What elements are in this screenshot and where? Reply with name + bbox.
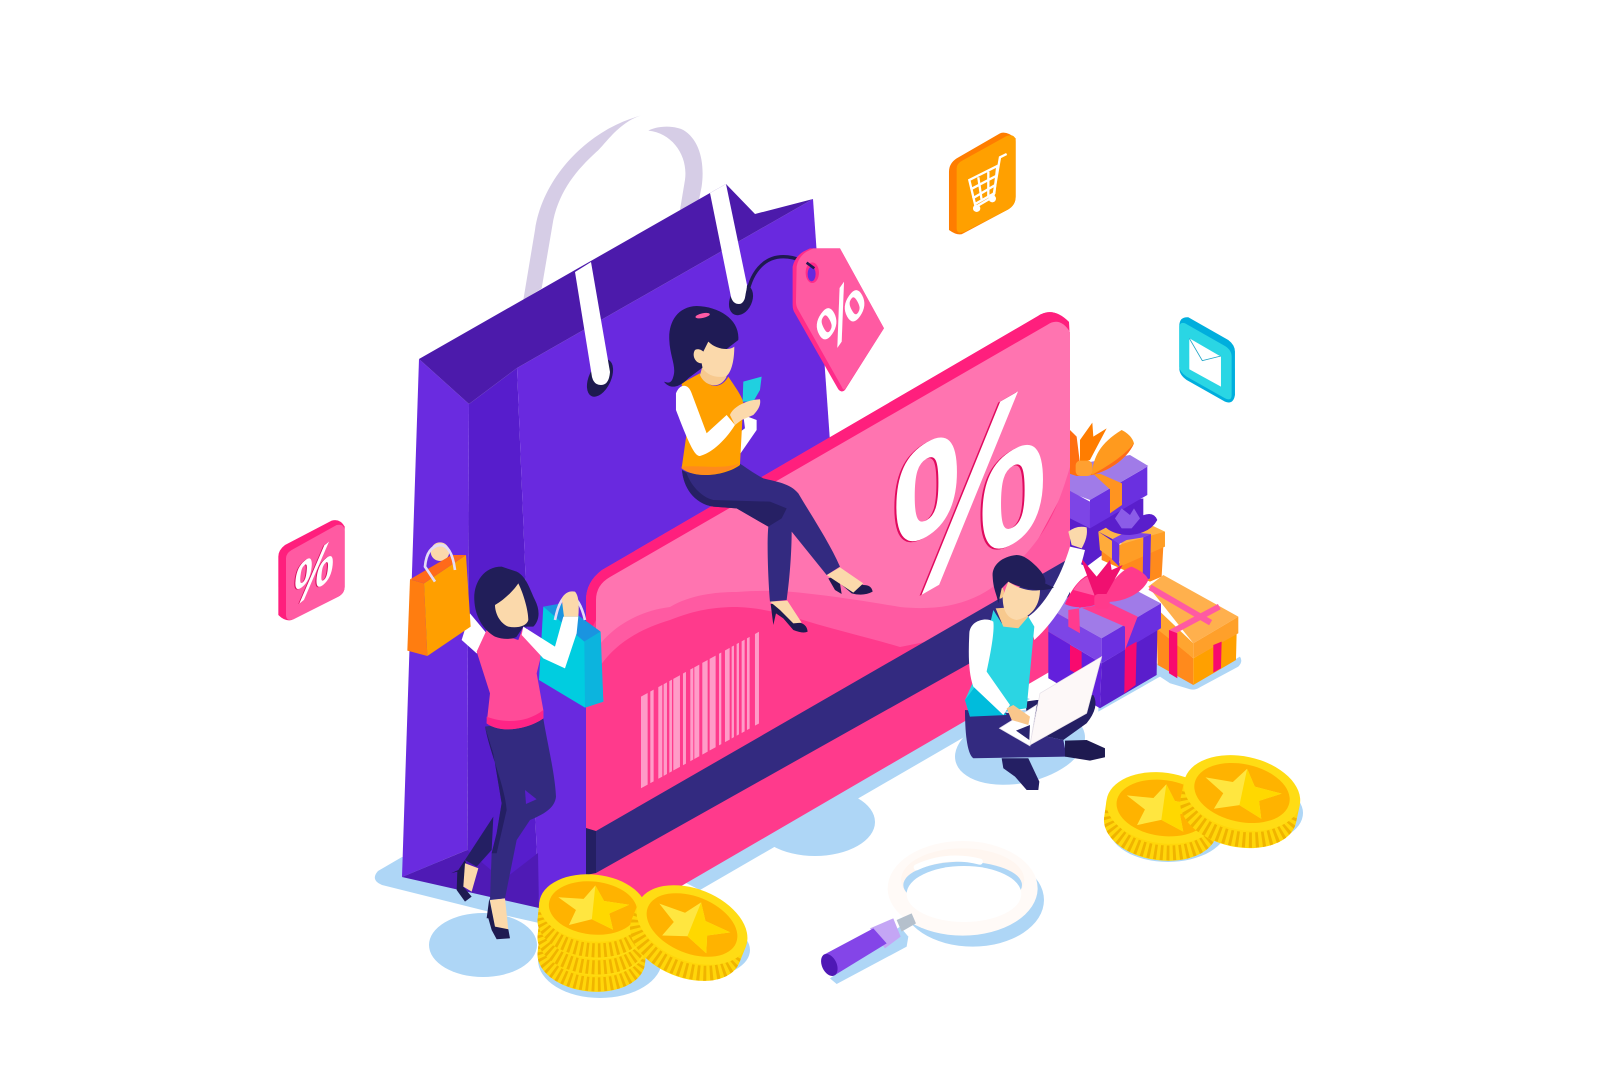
barcode [641, 632, 759, 788]
pink bow [1065, 557, 1148, 609]
legs and shoes [965, 695, 1105, 790]
flat orange gift [1148, 575, 1238, 685]
discount card [586, 312, 1070, 934]
torso [965, 610, 1034, 717]
bag handle front right [710, 184, 758, 319]
magnetic stripe [596, 558, 1070, 873]
teal bag and right arm [522, 591, 603, 708]
shopping bag [402, 115, 832, 908]
icon: shopping cart [949, 133, 1016, 234]
man with laptop [965, 527, 1105, 790]
bag handle back [523, 115, 703, 300]
raised arm [1028, 547, 1085, 640]
bag left face [402, 359, 469, 877]
card light face [596, 322, 1070, 700]
big percent sign: % [892, 328, 1048, 658]
gifts behind card [1063, 423, 1165, 582]
legs and heels [682, 463, 873, 633]
torso [477, 627, 543, 729]
shirt hem [965, 680, 1007, 717]
laptop [999, 657, 1102, 746]
hair [474, 567, 539, 639]
large purple gift [1048, 575, 1161, 708]
ground shadows [375, 657, 1303, 998]
icon: percent badge: % [290, 522, 338, 623]
small orange gift [1098, 508, 1165, 582]
legs and heels [451, 718, 556, 939]
card mid wave [596, 467, 1070, 670]
purple gift top [1063, 455, 1148, 567]
raised hand [1068, 527, 1087, 548]
face and hair [993, 555, 1054, 620]
orange bow [1063, 423, 1134, 476]
shirt hem [487, 710, 543, 729]
woman sitting on card [664, 306, 873, 633]
bag front face [517, 199, 832, 908]
icon: percent badge: % [289, 523, 337, 623]
gifts in front of card [1048, 557, 1238, 708]
left arm [969, 619, 1010, 715]
upper body [664, 306, 762, 475]
price tag with percent: % [807, 261, 874, 368]
icon: envelope [1179, 317, 1235, 402]
left arm and orange bag [407, 542, 487, 656]
price tag with percent [747, 248, 884, 391]
coin stack front [534, 869, 759, 997]
card rim and body [586, 312, 1070, 934]
magnifying glass [818, 841, 1044, 984]
card deep wave [596, 607, 925, 830]
bag bottom fold [402, 850, 539, 908]
bag top band [419, 184, 813, 404]
neck [996, 607, 1028, 628]
woman with shopping bags [407, 542, 603, 939]
coins right [1099, 745, 1307, 868]
bag handle front left [575, 262, 618, 401]
big percent sign: % [890, 329, 1046, 659]
typing hand [1007, 705, 1030, 725]
bag fold [467, 368, 539, 908]
face [495, 583, 528, 627]
